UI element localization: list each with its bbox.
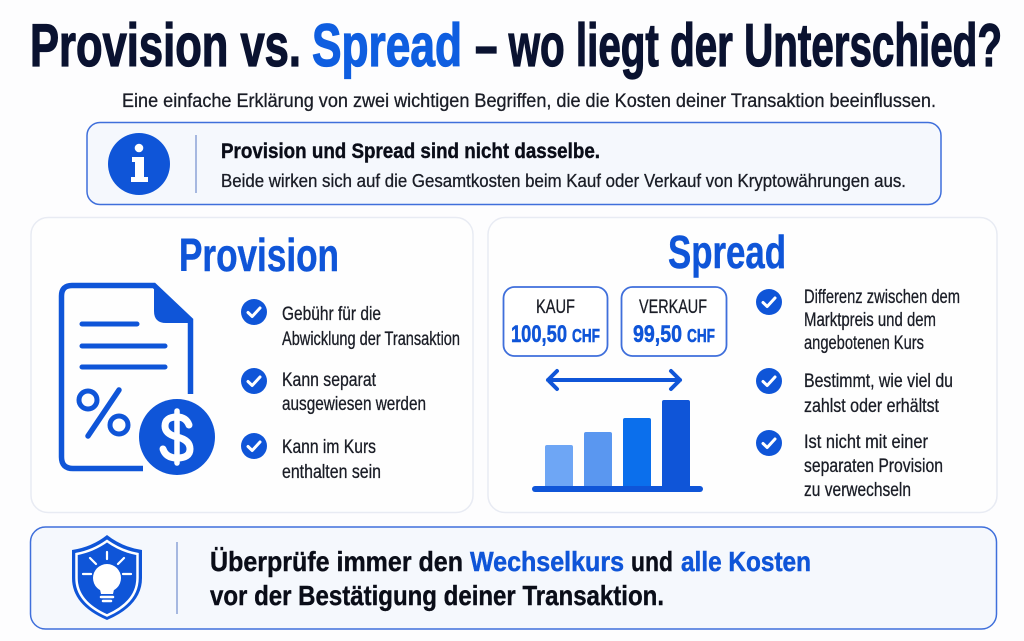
Provision heading: Provision	[179, 229, 339, 281]
price box: Kauf	[504, 287, 608, 356]
bullet: separat: ausgewiesen werden	[282, 394, 426, 415]
icon: document with percent and dollar	[62, 284, 215, 475]
bullet: Gebühr	[241, 299, 460, 350]
bullet: nicht verwechseln	[756, 430, 943, 501]
tip text: vor der Bestätigung deiner Transaktion.	[210, 580, 664, 611]
bullet: Gebühr: Gebühr für die	[282, 304, 381, 325]
price box: Verkauf	[622, 287, 726, 356]
bullet: Bestimmt: zahlst oder erhältst	[804, 396, 940, 417]
bullet: nicht verwechseln: zu verwechseln	[804, 480, 911, 501]
bullet: im Kurs: Kann im Kurs	[282, 437, 376, 458]
tip text	[210, 546, 811, 611]
bullet: nicht verwechseln: separaten Provision	[804, 456, 943, 477]
price box: Verkauf: VERKAUF	[639, 297, 707, 318]
title: Spread	[312, 12, 462, 79]
bullet: Bestimmt	[756, 368, 953, 417]
bullet: im Kurs: enthalten sein	[282, 462, 381, 483]
info text: Beide wirken sich auf die Gesamtkosten beim Kauf oder Verkauf von Kryptowährungen aus.	[221, 171, 906, 191]
price box: Kauf: CHF	[572, 326, 600, 346]
bullet: im Kurs	[241, 433, 381, 483]
price box: Verkauf: CHF	[687, 326, 715, 346]
bullet: separat	[241, 368, 426, 415]
panel: Spread	[488, 218, 997, 512]
subtitle: Eine einfache Erklärung von zwei wichtigen Begriffen, die die Kosten deiner Transaktion beeinflussen.	[122, 91, 936, 112]
info heading: Provision und Spread sind nicht dasselbe.	[221, 140, 600, 163]
price box: Verkauf: 99,50	[633, 321, 682, 348]
tip text: alle Kosten	[681, 546, 811, 577]
icon: info	[108, 133, 170, 195]
icon: shield with light bulb	[72, 535, 142, 620]
bullet: Differenz: angebotenen Kurs	[804, 333, 924, 354]
price box: Kauf: KAUF	[536, 297, 575, 318]
bullet: Differenz	[756, 287, 960, 354]
panel: tip banner	[30, 527, 996, 629]
bar chart	[532, 400, 703, 492]
bullet: nicht verwechseln: Ist nicht mit einer	[804, 432, 929, 453]
bullet: separat: Kann separat	[282, 370, 377, 391]
arrow: double-headed	[548, 371, 680, 389]
title: Provision vs.	[30, 12, 301, 79]
bullet: Differenz: Differenz zwischen dem	[804, 287, 960, 308]
bullet: Differenz: Marktpreis und dem	[804, 310, 936, 331]
tip text: und	[631, 546, 673, 577]
Spread heading: Spread	[668, 226, 786, 278]
tip text: Überprüfe immer den	[210, 546, 463, 577]
price box: Kauf: 100,50	[511, 321, 567, 348]
panel: info box	[87, 122, 941, 204]
panel: Provision	[31, 218, 473, 512]
title	[30, 12, 1002, 79]
bullet: Bestimmt: Bestimmt, wie viel du	[804, 371, 953, 392]
bullet: Gebühr: Abwicklung der Transaktion	[282, 329, 460, 350]
tip text: Wechselkurs	[470, 546, 624, 577]
